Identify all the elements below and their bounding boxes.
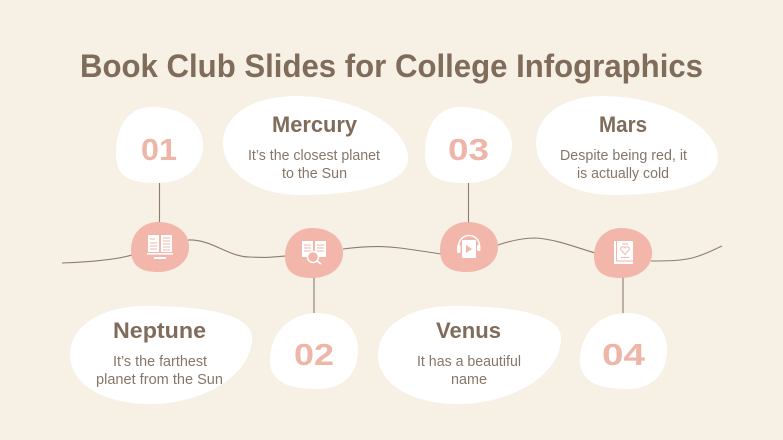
title: Book Club Slides for College Infographics [80,48,703,84]
text: Neptune description: planet from the Sun [96,372,223,388]
text: Mars description: Despite being red, it [560,148,687,164]
number badge 02: 02 [294,337,334,372]
text: Mars description: is actually cold [577,166,669,182]
connector: node 2 to 02 [313,277,315,314]
number badge 01: 01 [141,132,177,167]
connector: node 4 to 04 [622,277,624,314]
heading: Mars: Mars [599,112,647,137]
node 2 with icon: book with magnifier [285,228,343,278]
connector: 01 to node 1 [158,182,160,223]
panel: Neptune [70,306,252,404]
text: Venus description: name [451,372,487,388]
text: Mercury description: It’s the closest planet [248,148,380,164]
panel: Venus [378,306,561,404]
panel: Mercury [223,96,408,195]
heading: Mercury: Mercury [272,112,358,137]
heading: Neptune: Neptune [113,318,206,343]
number badge 03 [425,107,512,183]
text: Mercury description [248,148,380,182]
node 4 with icon: book with heart [594,228,652,278]
number badge 02 [270,313,358,389]
number badge 01 [116,107,203,183]
connector: 03 to node 3 [468,182,470,223]
text: Neptune description [96,354,223,388]
node 1 with icon: book on monitor [131,222,189,272]
heading: Venus: Venus [436,318,501,343]
number badge 04: 04 [602,337,646,372]
node 3 with icon: audiobook headphones [440,222,498,272]
number badge 04 [580,313,667,389]
text: Neptune description: It’s the farthest [113,354,207,370]
wavy timeline line [62,238,722,263]
text: Mercury description: to the Sun [282,166,347,182]
panel: Mars [536,96,718,195]
number badge 03: 03 [448,132,489,167]
text: Venus description: It has a beautiful [417,354,521,370]
text: Venus description [417,354,521,388]
text: Mars description [560,148,687,182]
